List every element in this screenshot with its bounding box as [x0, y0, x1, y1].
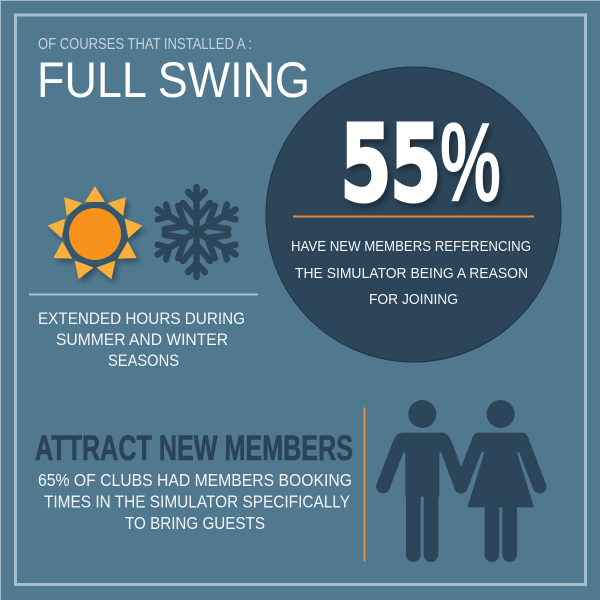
percent sign: % — [440, 99, 501, 225]
circle caption: THE SIMULATOR BEING A REASON — [295, 265, 528, 282]
eyebrow text: OF COURSES THAT INSTALLED A : — [38, 36, 252, 53]
heading: attract new members: ATTRACT NEW MEMBERS — [35, 429, 353, 468]
circle caption: FOR JOINING — [369, 291, 458, 308]
orange vertical divider — [364, 408, 366, 562]
text: 65 percent of clubs: TO BRING GUESTS — [125, 513, 265, 533]
text: 65 percent of clubs — [38, 470, 352, 533]
text: extended hours: EXTENDED HOURS DURING — [38, 310, 245, 328]
title: FULL SWING — [37, 52, 310, 108]
icon: snowflake — [151, 187, 242, 277]
circle caption: HAVE NEW MEMBERS REFERENCING — [291, 238, 531, 255]
icon: sun — [46, 186, 144, 283]
text: extended hours: SUMMER AND WINTER — [56, 331, 228, 349]
panel: 55 percent circle — [266, 67, 561, 362]
text: 65 percent of clubs: TIMES IN THE SIMULATOR SPECIFICALLY — [44, 492, 350, 512]
text: extended hours: SEASONS — [108, 352, 179, 370]
icon: couple — [383, 400, 540, 555]
woman — [461, 400, 540, 555]
text: extended hours — [38, 310, 245, 370]
text: 65 percent of clubs: 65% OF CLUBS HAD MEMBERS BOOKING — [38, 470, 352, 490]
orange divider — [293, 216, 534, 218]
man — [383, 400, 461, 555]
big number 55: 55 — [340, 102, 441, 226]
circle caption — [291, 238, 531, 308]
